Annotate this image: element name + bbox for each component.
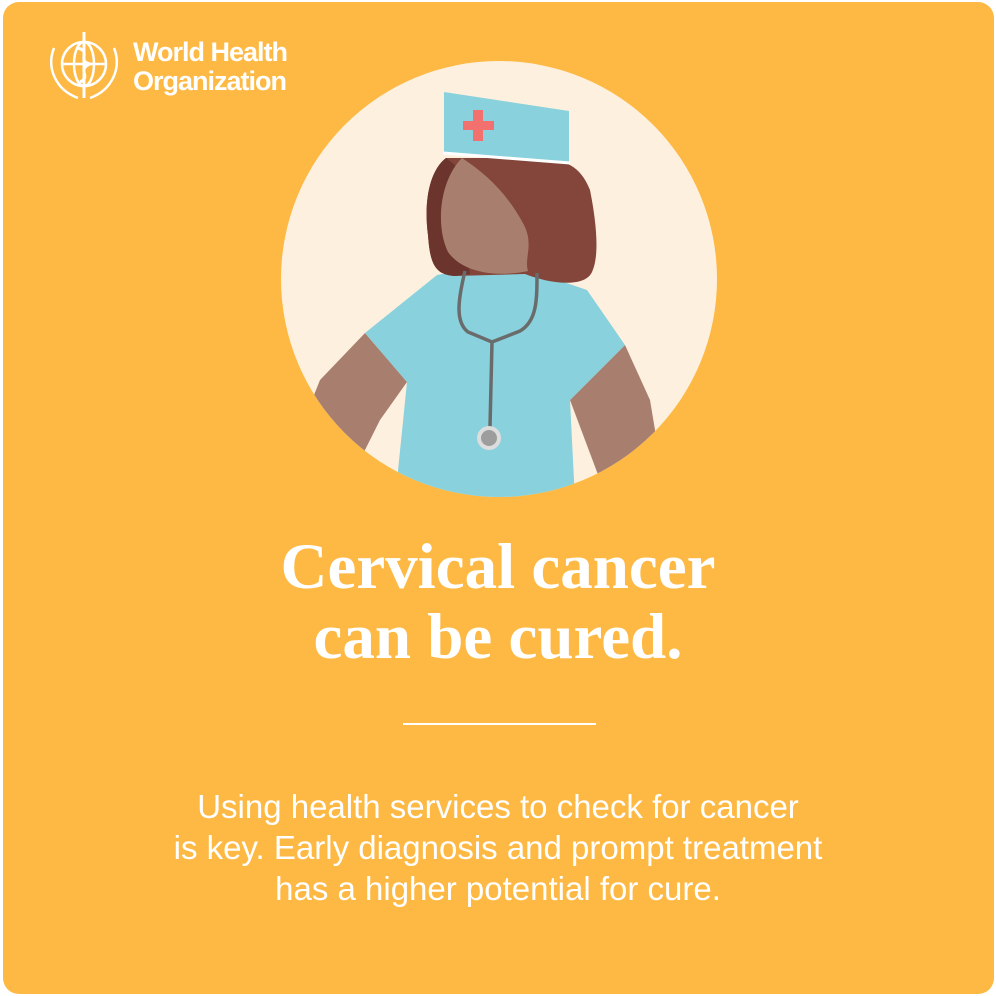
logo: WHO [50,32,287,99]
text: organization name: Organization [133,66,286,96]
left arm [314,333,407,450]
icon: WHO emblem [50,32,118,99]
right arm [570,345,660,480]
illustration: nurse in circle [281,61,717,497]
title: can be cured. [314,601,682,673]
title [281,531,715,673]
stethoscope [459,271,537,427]
shirt [365,270,625,500]
title: Cervical cancer [281,531,715,603]
cap [444,92,569,162]
text block: description: has a higher potential for cure. [275,870,721,907]
text: organization name: World Health [133,37,287,67]
text block: description: is key. Early diagnosis and prompt treatment [174,829,822,866]
text block: description: Using health services to check for cancer [197,788,799,825]
text: organization name [133,37,287,96]
hair [427,158,596,283]
text block: description [174,788,822,907]
face [441,158,529,274]
